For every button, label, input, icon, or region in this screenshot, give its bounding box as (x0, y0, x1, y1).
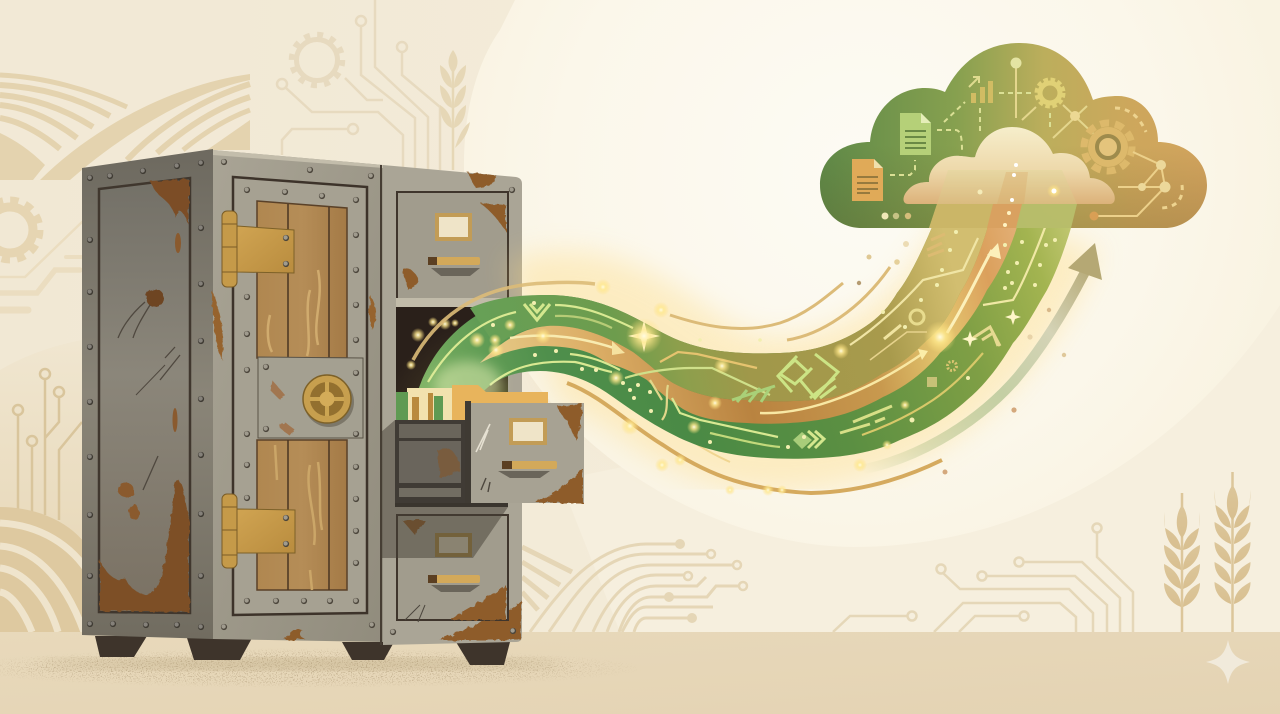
panel: top-left farm field (0, 74, 250, 180)
gold stream lines and arrows (510, 243, 1001, 413)
circuit lines: bottom-right (833, 524, 1133, 632)
open drawer (395, 385, 584, 507)
drawer body dark (395, 420, 465, 503)
circuit lines: left (0, 222, 82, 310)
circuit traces light (428, 204, 1053, 447)
icon: gear large (1084, 123, 1132, 171)
status dots (882, 212, 911, 220)
panel: bottom-centre field arcs and circuit (522, 540, 747, 632)
stream glow (535, 225, 1025, 414)
band trails over inner cloud (937, 163, 1077, 227)
icon: document green (900, 113, 931, 155)
bright sky arc (464, 0, 1280, 547)
panel: bottom-left field arcs (0, 507, 95, 632)
cabinet side panel (82, 149, 213, 639)
panel: metal filing cabinet (82, 149, 522, 665)
cabinet front face (212, 150, 383, 642)
cabinet feet (95, 636, 510, 665)
panel: data stream (413, 204, 1102, 496)
icon: background wheat top (440, 50, 470, 170)
upper olive band (470, 204, 993, 401)
icon: background gear top (292, 34, 342, 86)
stream entrance fade over cavity (434, 361, 502, 409)
drawer base shadow (395, 503, 508, 507)
cloud node lines (1010, 58, 1100, 140)
outer cloud (820, 43, 1207, 228)
wood panel lower (257, 440, 347, 590)
shadow of open drawer (380, 420, 508, 558)
door lock plate (258, 357, 363, 438)
gold band (480, 204, 1022, 424)
icon: combination dial (303, 375, 354, 427)
icon: wheat stalk tall (1214, 472, 1250, 632)
sparkle points (469, 279, 1021, 496)
big rising arrow (845, 243, 1102, 472)
icon: wheat stalk short (1164, 493, 1200, 632)
pattern: chevrons and shapes (524, 234, 1000, 448)
brass hinge top (222, 211, 294, 287)
panel: cloud (820, 43, 1207, 228)
cavity sparks (406, 317, 459, 370)
icon: gear small (1036, 80, 1064, 106)
cabinet right section (381, 165, 522, 645)
green band (413, 204, 1077, 459)
cabinet divider rail (396, 298, 508, 307)
cloud connectors (890, 93, 1050, 175)
node network right (1090, 108, 1182, 220)
drawer bottom (397, 515, 508, 622)
icon: bar chart with arrow (969, 77, 993, 103)
stream dots (491, 230, 1057, 449)
folders in drawer (396, 385, 548, 422)
wood panel upper (257, 201, 347, 358)
circuit lines: top centre (277, 0, 440, 170)
ground (0, 632, 1280, 714)
open drawer cavity (396, 307, 508, 422)
icon: white sparkle on ground (1206, 640, 1250, 684)
drawer front (465, 401, 584, 503)
left hill with circuit (0, 340, 82, 632)
inner cloud (904, 127, 1115, 204)
cloud lower shading (820, 43, 1207, 228)
pattern: maze block (732, 354, 838, 402)
drawer top (397, 192, 508, 300)
band rising through cloud (929, 204, 1077, 228)
safe door (221, 159, 375, 630)
icon: document orange (852, 159, 883, 201)
stream outer arcs (413, 267, 942, 493)
icon: background gear left (0, 200, 40, 260)
brass hinge bottom (222, 494, 295, 568)
floating particles (857, 241, 1066, 474)
